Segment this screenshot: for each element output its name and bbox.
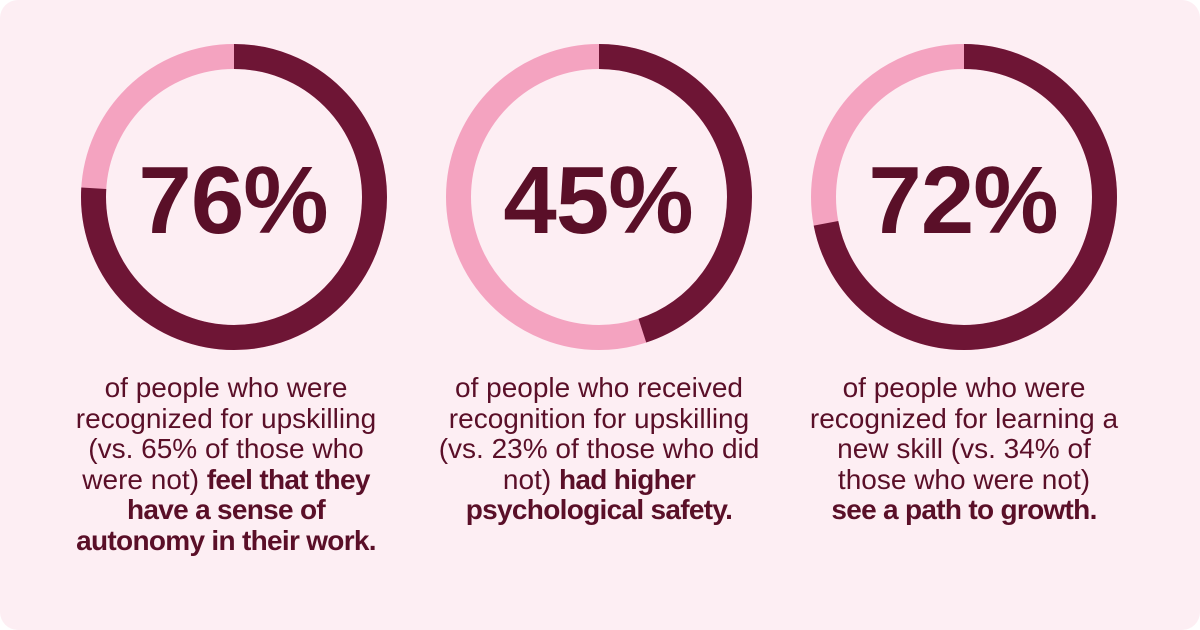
text: stat 1: autonomy in their work.: [76, 524, 376, 556]
ring 3: 72%: 72%: [868, 147, 1058, 254]
text: stat 3: recognized for learning a: [810, 402, 1118, 434]
text: stat 3: see a path to growth.: [831, 494, 1097, 525]
text: stat 1: have a sense of: [127, 494, 325, 525]
text: stat 2: psychological safety.: [466, 494, 732, 525]
ring 2: 45%: 45%: [503, 147, 693, 254]
text: stat 1: (vs. 65% of those who: [88, 433, 364, 464]
text: stat 3: [810, 372, 1118, 525]
text: stat 2: not) had higher: [503, 464, 695, 494]
text: stat 3: new skill (vs. 34% of: [837, 433, 1091, 464]
text: stat 2: recognition for upskilling: [449, 402, 749, 434]
text: stat 1: recognized for upskilling: [76, 402, 376, 434]
text: stat 1: of people who were: [105, 372, 347, 403]
text: stat 3: those who were not): [838, 464, 1090, 494]
ring 3: 72%: [824, 56, 1104, 338]
text: stat 2: [439, 372, 759, 525]
ring 1: 76%: 76%: [138, 147, 328, 254]
text: stat 3: of people who were: [843, 372, 1085, 403]
ring 1: 76%: [94, 56, 374, 338]
text: stat 1: [76, 372, 376, 556]
text: stat 2: (vs. 23% of those who did: [439, 433, 759, 464]
text: stat 1: were not) feel that they: [82, 464, 370, 494]
text: stat 2: of people who received: [455, 372, 743, 403]
ring 2: 45%: [458, 56, 740, 338]
